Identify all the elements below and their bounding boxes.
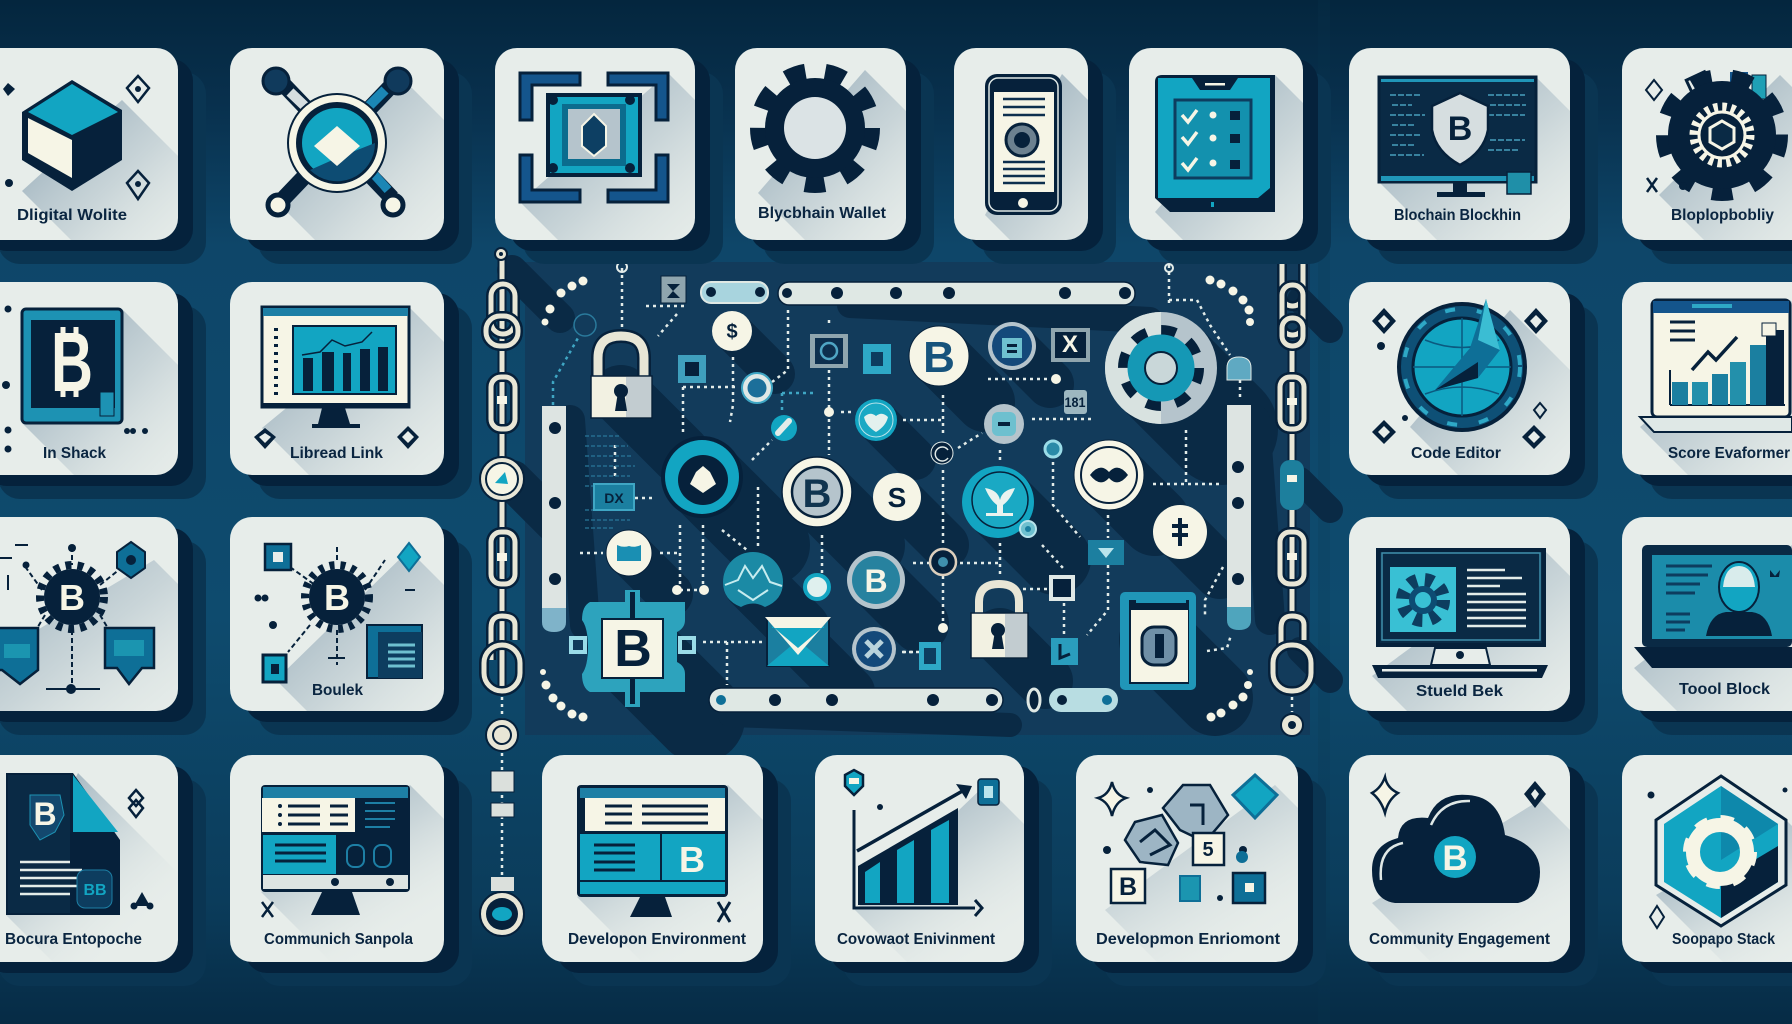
card: Developon Environment xyxy=(542,755,791,973)
icon: developer monitor xyxy=(577,785,730,922)
label: Stueld Bek xyxy=(1416,683,1503,700)
node: ring teal xyxy=(1045,441,1061,457)
node: X coin xyxy=(852,627,896,671)
card: Covowaot Enivinment xyxy=(815,755,1052,973)
card: tool xyxy=(230,48,472,264)
node: small teal tag xyxy=(919,642,941,670)
node: B coin top: B xyxy=(923,333,955,382)
node: mountain coin xyxy=(723,552,783,607)
node: plus coin xyxy=(1153,505,1207,559)
label: Blochain Blockhin xyxy=(1394,207,1521,224)
node: target ring xyxy=(930,549,956,575)
icon: linked blocks xyxy=(1098,775,1277,903)
label: Covowaot Enivinment xyxy=(837,931,996,948)
icon: bitcoin tile: B xyxy=(51,315,93,409)
icon: linked blocks: 5 xyxy=(1202,839,1214,861)
chain: right xyxy=(1273,251,1311,736)
icon: cloud with coin: B xyxy=(1442,839,1468,878)
card: Community Engagement xyxy=(1349,755,1598,973)
icon: tablet with checklist xyxy=(1155,75,1275,212)
node: small ring xyxy=(805,575,829,599)
node: square ring xyxy=(1049,575,1075,601)
card: Development Environment 2 xyxy=(1076,755,1326,973)
dot arcs xyxy=(540,276,1254,722)
node: B teal coin xyxy=(847,551,905,609)
icon: laptop person xyxy=(1634,545,1792,668)
icon: puzzle block with B xyxy=(571,590,694,707)
node: dollar coin xyxy=(712,311,752,351)
card: Blockchain Wallet xyxy=(735,48,934,264)
icon: bitcoin node network: B xyxy=(324,577,350,618)
node: B coin top xyxy=(909,326,969,386)
icon: monitor dashboard xyxy=(261,785,410,917)
node: ring xyxy=(742,373,772,403)
label: Blycbhain Wallet xyxy=(758,205,887,222)
card: network left xyxy=(0,517,206,735)
card: In Shack xyxy=(0,282,206,499)
node: ghost coin xyxy=(574,314,596,336)
icon: linked blocks: B xyxy=(1119,873,1137,901)
chain: left xyxy=(480,248,524,936)
icon: monitor with chart xyxy=(254,307,419,449)
node: small code label: 181 xyxy=(1064,394,1086,410)
card: Score Evaformer xyxy=(1622,282,1792,499)
icon: envelope xyxy=(765,617,831,666)
label: Soopapo Stack xyxy=(1672,931,1775,948)
rail: left xyxy=(542,406,566,632)
icon: double gear xyxy=(1646,72,1780,193)
node: X square xyxy=(1051,328,1090,362)
icon: cube xyxy=(3,76,149,199)
label: Community Engagement xyxy=(1369,931,1551,948)
node: teal square xyxy=(863,344,891,374)
icon: gear xyxy=(761,74,869,182)
icon: app card xyxy=(1120,592,1196,690)
node: X square: X xyxy=(1062,331,1078,358)
node: B coin xyxy=(782,457,852,527)
icon: circuit chip xyxy=(520,73,668,202)
label: Developon Environment xyxy=(568,931,747,948)
node: small code label xyxy=(1064,390,1087,414)
card: Tool Block xyxy=(1622,517,1792,735)
node: code box: DX xyxy=(604,490,624,506)
dashed connector lines xyxy=(553,262,1240,685)
rail: bottom xyxy=(709,688,1118,712)
long shadows for network nodes xyxy=(512,270,1330,725)
icon: monitor with gear xyxy=(1372,550,1548,678)
icon: bitcoin network xyxy=(0,542,154,694)
node: S coin xyxy=(873,473,921,521)
label: Toool Block xyxy=(1679,681,1770,698)
node: grey square xyxy=(810,334,848,368)
node: blue coin xyxy=(988,322,1036,370)
card: Bocura Entopoche xyxy=(0,755,206,973)
card: Communich Sanpola xyxy=(230,755,472,973)
label: Developmon Enriomont xyxy=(1096,931,1281,948)
node: Y teal coin xyxy=(962,466,1034,538)
ghost code grid xyxy=(585,436,635,528)
rail: right xyxy=(1227,357,1251,630)
icon: developer monitor: B xyxy=(679,839,705,880)
label: Communich Sanpola xyxy=(264,931,413,948)
icon: laptop chart xyxy=(1640,300,1792,432)
rail: top xyxy=(701,282,1135,305)
icon: globe compass xyxy=(1372,299,1548,449)
card: Boulek xyxy=(230,517,472,735)
card: Code Editor xyxy=(1349,282,1598,499)
node: teal tag xyxy=(1051,638,1078,665)
node: hourglass square xyxy=(661,276,686,303)
card: checklist tablet xyxy=(1129,48,1331,264)
node: teal funnel box xyxy=(1088,540,1124,565)
icon: monitor with shield xyxy=(1379,77,1536,197)
label: Bloplopbobliy xyxy=(1671,207,1774,224)
icon: bitcoin tile xyxy=(2,306,148,452)
icon: smartphone xyxy=(985,74,1062,215)
card: Blockchain gear xyxy=(1622,48,1792,264)
card: chip xyxy=(495,48,723,264)
panel: central blockchain network xyxy=(480,0,1330,1024)
node: fish coin xyxy=(1074,440,1144,510)
icon: cloud with coin xyxy=(1372,777,1546,903)
node: book coin xyxy=(606,530,652,576)
node: dollar coin: $ xyxy=(726,321,738,343)
node: pill xyxy=(771,415,797,441)
label: In Shack xyxy=(43,445,106,462)
node: large teal coin xyxy=(661,436,743,518)
icon: padlock left xyxy=(591,336,652,418)
node: B coin: B xyxy=(803,472,831,516)
icon: document xyxy=(6,773,154,915)
node: heart coin xyxy=(855,399,897,441)
node: B teal coin: B xyxy=(864,563,888,599)
node: large gear disk xyxy=(1105,312,1217,424)
icon: document: B xyxy=(33,796,57,832)
card: Blockchain monitor xyxy=(1349,48,1598,264)
card: Scope Stack xyxy=(1622,755,1792,973)
node: B small coin xyxy=(984,404,1024,444)
node: tiny ring xyxy=(1020,521,1036,537)
card: phone xyxy=(954,48,1116,264)
card: Libread Link xyxy=(230,282,472,499)
card: Stueld Bek xyxy=(1349,517,1598,735)
node: code box xyxy=(594,484,634,510)
node: dark ring xyxy=(931,442,953,464)
node: S coin: S xyxy=(888,482,906,513)
label: Code Editor xyxy=(1411,445,1501,462)
icon: hex gear xyxy=(1648,776,1788,928)
label: Boulek xyxy=(312,682,363,699)
icon: growth chart xyxy=(845,770,999,916)
icon: monitor with shield: B xyxy=(1448,110,1472,148)
icon: document: BB xyxy=(83,882,107,899)
icon: padlock right xyxy=(971,584,1028,658)
icon: bitcoin network: B xyxy=(59,577,85,618)
node: small teal square xyxy=(678,355,706,383)
label: Libread Link xyxy=(290,445,383,462)
label: Bocura Entopoche xyxy=(5,931,142,948)
label: Dligital Wolite xyxy=(17,207,127,224)
card: Digital Wallet xyxy=(0,48,206,264)
icon: puzzle block with B: B xyxy=(614,620,652,678)
icon: crossed tools with lens xyxy=(263,68,411,215)
icon: bitcoin node network xyxy=(254,543,422,682)
